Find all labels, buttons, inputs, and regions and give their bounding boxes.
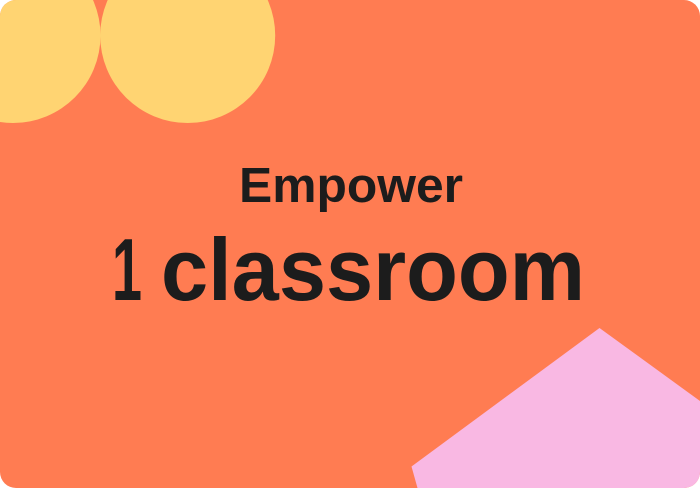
decorative right yellow circle (100, 0, 275, 123)
decorative pink polygon (412, 328, 700, 488)
heading: Empower: Empower (239, 159, 463, 213)
decorative left yellow circle (0, 0, 100, 123)
heading: 1 classroom: 1 (112, 220, 142, 319)
heading: 1 classroom: classroom (161, 220, 585, 319)
